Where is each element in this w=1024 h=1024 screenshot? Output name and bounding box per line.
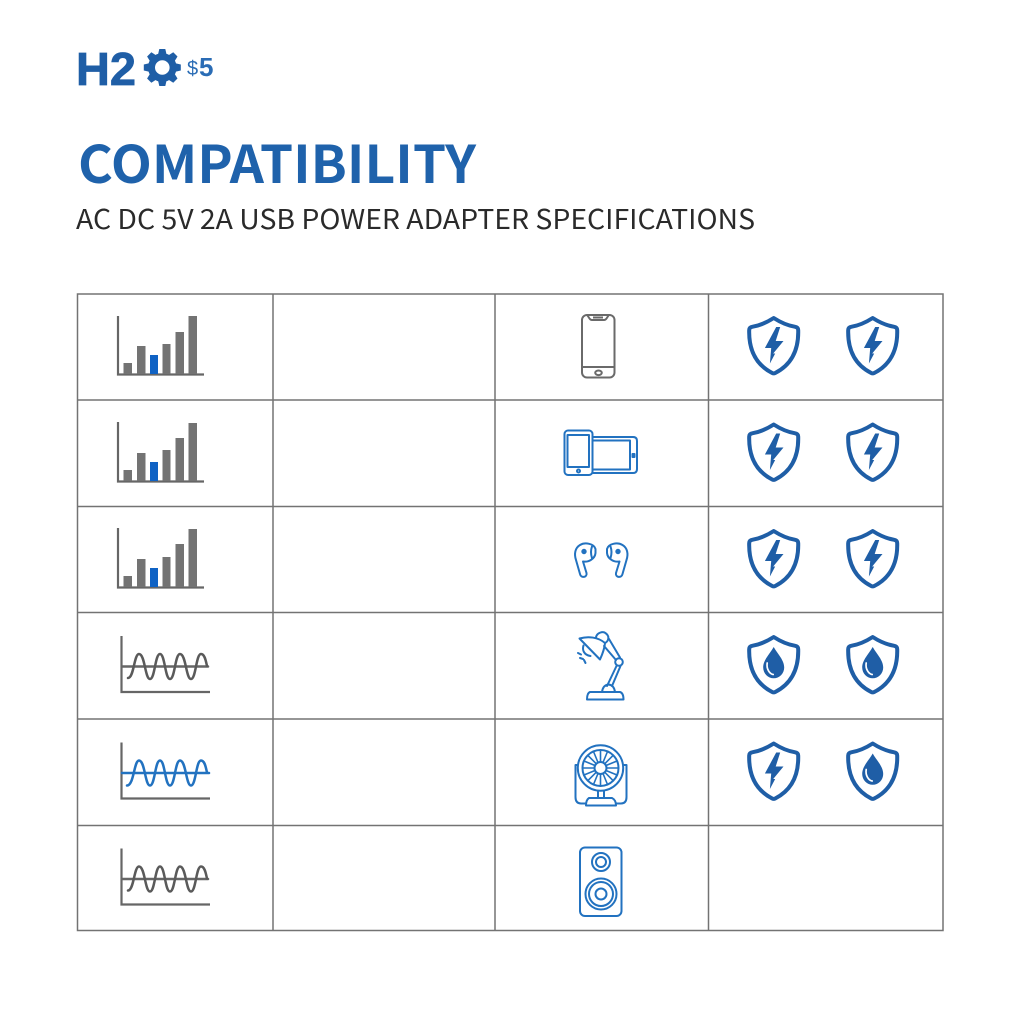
icon: desk lamp xyxy=(578,632,624,700)
subtitle: AC DC 5V 2A USB POWER ADAPTER SPECIFICATIONS xyxy=(76,198,755,237)
logo text: H2: H2 xyxy=(76,43,136,95)
shield: row 1 right xyxy=(848,318,897,373)
shield: row 3 right xyxy=(848,531,897,586)
shield: row 2 right xyxy=(848,424,897,480)
wave chart row 4 xyxy=(122,636,210,692)
icon: speaker xyxy=(580,848,622,916)
shield: row 1 left xyxy=(749,318,798,373)
bar chart row 1 xyxy=(118,316,204,374)
logo xyxy=(76,43,213,95)
shield: row 3 left xyxy=(749,531,798,586)
shield: row 4 right xyxy=(848,637,897,692)
shield: row 5 right xyxy=(848,744,897,799)
logo text: $5: 5 xyxy=(199,52,213,82)
icon: smartphone xyxy=(582,315,614,378)
shield: row 4 left xyxy=(749,637,798,692)
bar chart row 2 xyxy=(118,422,204,482)
icon: phone and tablet xyxy=(564,430,637,475)
shield: row 2 left xyxy=(749,424,798,480)
title: COMPATIBILITY xyxy=(78,123,477,198)
table grid xyxy=(78,294,943,930)
icon: earbuds xyxy=(575,543,627,577)
icon: fan xyxy=(576,745,626,806)
bar chart row 3 xyxy=(118,528,204,588)
shield: row 5 left xyxy=(749,744,798,799)
wave chart row 5 xyxy=(122,742,210,798)
icon: gear xyxy=(144,49,181,86)
wave chart row 6 xyxy=(122,848,210,904)
logo text: $5: $ xyxy=(187,58,198,80)
